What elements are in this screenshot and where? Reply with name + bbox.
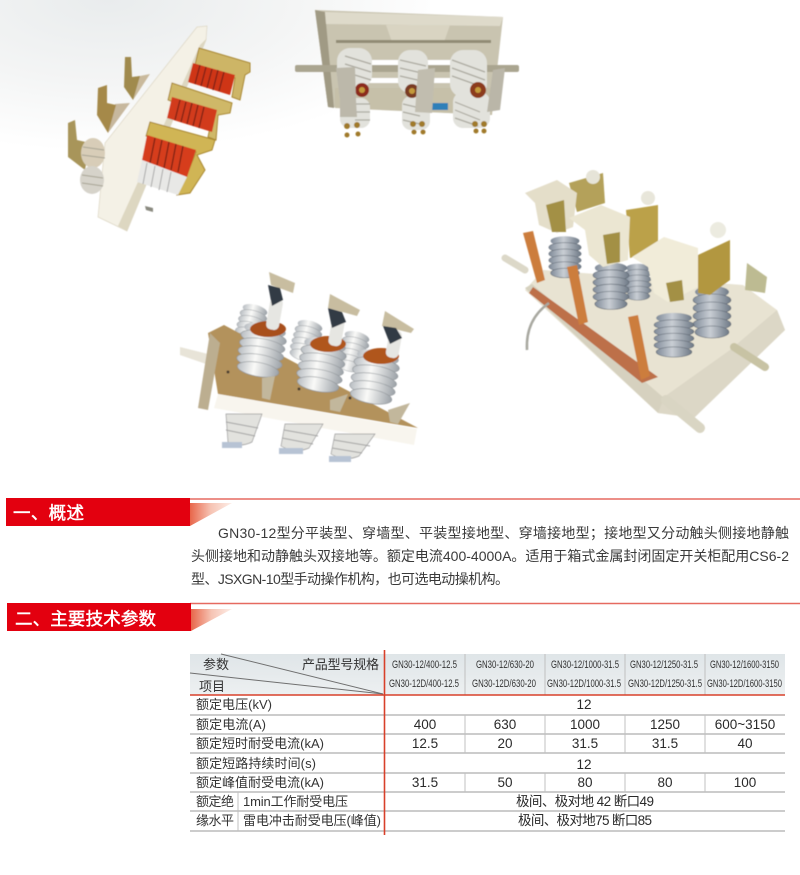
table header: model numbers: GN30-12D/1250-31.5 [628,678,702,690]
table values: 12 [576,757,592,772]
table values: 12.5 [412,736,438,751]
section heading: overview [6,498,800,526]
table header: model numbers: GN30-12D/630-20 [472,678,536,690]
table values: 极间、极对地 42 断口49 [516,794,654,809]
overview paragraph: GN30-12型分平装型、穿墙型、平装型接地型、穿墙接地型；接地型又分动触头侧接地静触 [218,525,789,542]
overview paragraph [191,525,789,587]
table row labels: 额定绝 [196,794,234,809]
table values: 31.5 [412,775,438,790]
table values: 400 [414,717,436,732]
table values: 630 [494,717,516,732]
table header: model numbers: GN30-12/630-20 [476,659,534,671]
table header: parameter / model labels: 参数 [203,657,229,672]
overview paragraph: 头侧接地和动静触头双接地等。额定电流400-4000A。适用于箱式金属封闭固定开关柜配用CS6-2 [191,548,789,564]
section heading: main technical parameters [7,603,800,631]
technical parameters table [190,650,785,835]
overview paragraph: 型、JSXGN-10型手动操作机构，也可选电动操机构。 [191,571,509,587]
product photo: switch with white contact blocks [505,170,785,428]
table row labels [196,697,381,828]
table row labels: 额定电压(kV) [196,697,272,712]
table values: 40 [737,736,753,751]
product photo: switch with rear plate [295,10,519,138]
table values: 600~3150 [715,717,775,732]
table header: model numbers [389,659,782,690]
product photo: switch with red insulators [68,26,250,231]
table header: model numbers: GN30-12/1250-31.5 [630,659,698,671]
table header: parameter / model labels [199,657,379,694]
table values: 31.5 [572,736,598,751]
table header: parameter / model labels: 产品型号规格 [302,657,379,672]
table values: 80 [577,775,593,790]
table values: 50 [497,775,513,790]
table row labels: 额定峰值耐受电流(kA) [196,775,324,790]
table header: parameter / model labels: 项目 [199,679,225,694]
table values: 80 [657,775,673,790]
table row labels: 雷电冲击耐受电压(峰值) [243,813,381,828]
table row labels: 额定短路持续时间(s) [196,756,316,771]
table header: model numbers: GN30-12/400-12.5 [392,659,457,671]
table values: 20 [497,736,513,751]
table row labels: 缘水平 [196,813,234,828]
table header: model numbers: GN30-12D/1000-31.5 [547,678,621,690]
section heading: main technical parameters: 二、主要技术参数 [15,609,156,629]
table values: 极间、极对地75 断口85 [518,813,652,828]
section heading: overview: 一、概述 [13,503,84,523]
table values: 1250 [650,717,680,732]
table header: model numbers: GN30-12D/400-12.5 [389,678,459,690]
table row labels: 1min工作耐受电压 [243,794,348,809]
table values: 1000 [570,717,600,732]
table row labels: 额定电流(A) [196,717,266,732]
table header: model numbers: GN30-12/1000-31.5 [551,659,619,671]
table values [412,697,775,828]
table values: 100 [734,775,756,790]
table row labels: 额定短时耐受电流(kA) [196,736,324,751]
product photo: switch with tan mounting plate [180,272,418,462]
table values: 31.5 [652,736,678,751]
table values: 12 [576,697,592,712]
